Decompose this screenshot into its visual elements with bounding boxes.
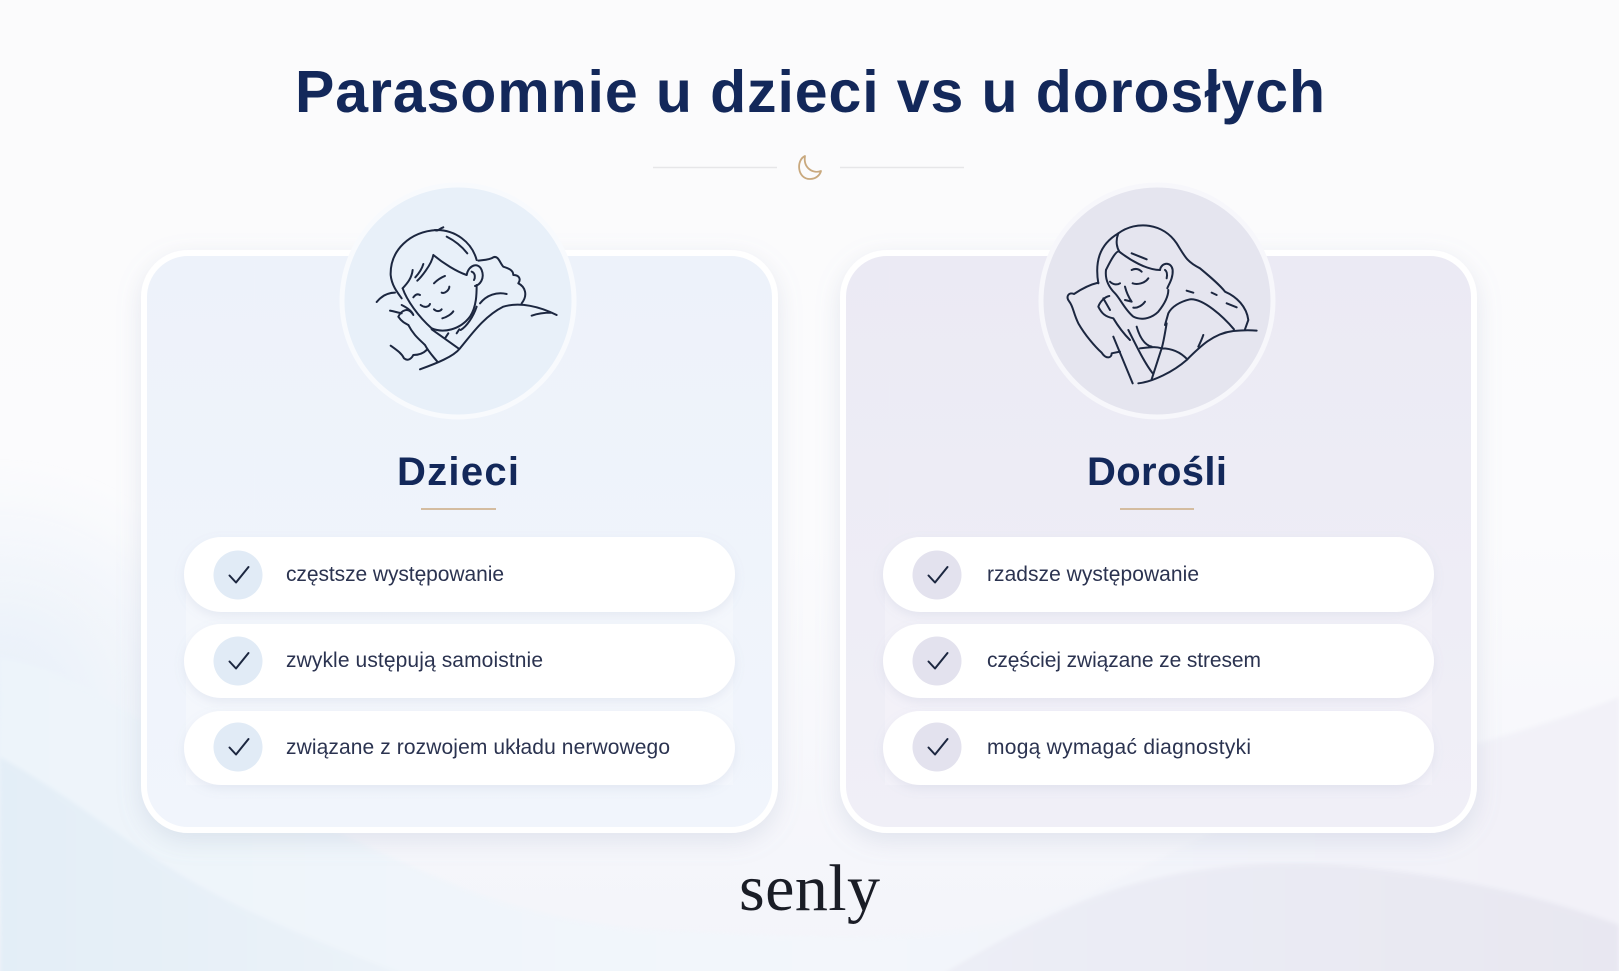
heading underline	[421, 508, 496, 510]
list backing band	[186, 590, 733, 785]
list item 3: związane z rozwojem układu nerwowego	[286, 736, 670, 759]
list item 3	[184, 711, 735, 785]
list item 2	[184, 624, 735, 698]
list item 2	[883, 624, 1434, 698]
icon: sleeping woman	[1068, 225, 1257, 383]
heading: Dzieci: Dzieci	[397, 450, 519, 494]
list item 3	[883, 711, 1434, 785]
list item 2: zwykle ustępują samoistnie	[286, 649, 543, 672]
list item 1	[184, 537, 735, 612]
list item 2: częściej związane ze stresem	[987, 649, 1261, 672]
divider with moon icon	[653, 156, 964, 179]
heading underline	[1120, 508, 1194, 510]
list item 1: częstsze występowanie	[286, 563, 504, 586]
panel: Dzieci	[144, 185, 775, 830]
card background	[843, 253, 1474, 830]
title: Parasomnie u dzieci vs u dorosłych	[295, 59, 1325, 125]
background waves	[0, 460, 1619, 971]
list item 3: mogą wymagać diagnostyki	[987, 736, 1251, 759]
list backing band	[885, 590, 1432, 785]
avatar circle: adult	[1041, 185, 1273, 417]
card background	[144, 253, 775, 830]
panel: Dorośli	[843, 185, 1474, 830]
avatar circle: child	[342, 185, 574, 417]
logo: senly: senly	[739, 852, 880, 925]
list item 1	[883, 537, 1434, 612]
icon: sleeping child	[377, 227, 557, 369]
heading: Dorośli: Dorośli	[1087, 450, 1227, 494]
list item 1: rzadsze występowanie	[987, 563, 1199, 586]
